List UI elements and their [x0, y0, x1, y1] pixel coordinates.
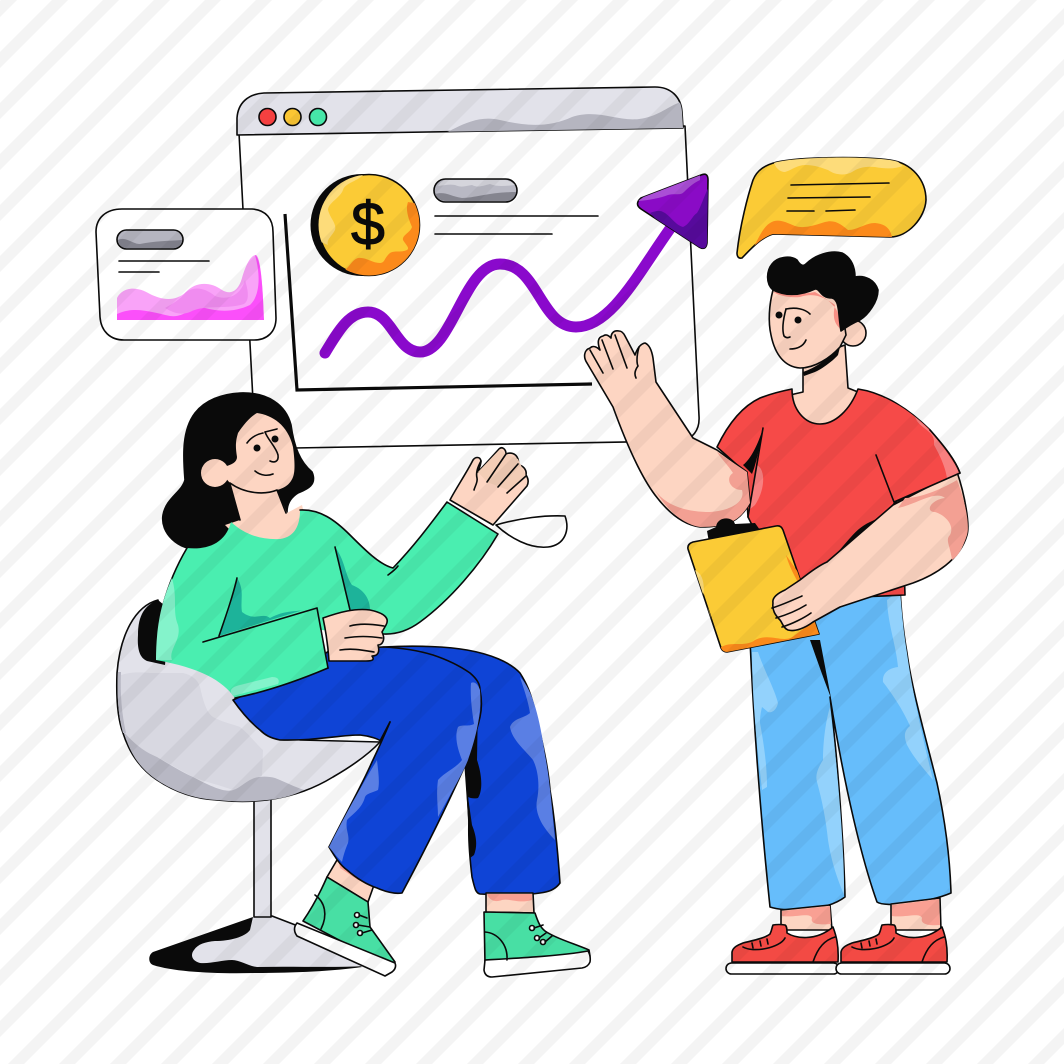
chair pole — [254, 796, 271, 917]
chair left edge shading — [118, 672, 126, 733]
ankles — [327, 860, 534, 913]
browser window panel — [237, 87, 710, 448]
chair — [117, 600, 380, 973]
trousers — [750, 588, 951, 910]
chart axes — [285, 214, 592, 390]
card outline — [96, 209, 276, 340]
chair seat — [117, 600, 380, 802]
arrow head — [638, 170, 710, 255]
red shoes — [726, 924, 950, 974]
coin icon — [310, 174, 420, 276]
lap hand — [323, 609, 387, 661]
t-shirt — [717, 389, 960, 600]
sleeve cap — [876, 398, 960, 502]
shoe: right foot — [484, 912, 590, 977]
torso shadow — [827, 502, 903, 562]
neck — [225, 484, 310, 550]
tag loop — [496, 516, 567, 547]
window title bar — [237, 87, 683, 135]
clipboard — [688, 526, 825, 660]
hair — [768, 252, 878, 331]
shoe: left foot — [294, 877, 396, 976]
rising trend line — [325, 226, 672, 353]
chair inner shading — [120, 672, 263, 790]
chair shadow — [124, 732, 304, 802]
raised arm — [585, 331, 750, 527]
coin icon: $ — [351, 190, 385, 258]
small area chart card — [96, 209, 276, 340]
hair — [163, 393, 314, 550]
near leg — [233, 647, 482, 893]
face — [201, 413, 294, 493]
sweater — [156, 502, 498, 698]
clipboard clip — [707, 518, 760, 548]
neck — [790, 345, 858, 425]
chair back cushion — [138, 600, 170, 665]
window control buttons — [259, 108, 326, 126]
far leg — [383, 646, 560, 895]
raised hand — [450, 448, 528, 525]
pink area chart — [117, 255, 264, 320]
card pill — [117, 230, 183, 249]
speech bubble — [737, 155, 926, 258]
woman figure — [156, 393, 590, 977]
bubble top highlight — [774, 158, 903, 174]
face — [769, 285, 866, 368]
text lines — [435, 216, 598, 234]
ankles — [781, 898, 941, 930]
holding arm — [772, 472, 968, 631]
placeholder pill — [434, 179, 517, 202]
card text lines — [119, 261, 209, 272]
bubble orange shading — [754, 220, 892, 246]
title bar shading — [447, 102, 683, 132]
man figure — [585, 252, 968, 974]
window body — [239, 126, 699, 448]
bubble text lines — [787, 183, 889, 211]
chair base — [149, 916, 362, 973]
